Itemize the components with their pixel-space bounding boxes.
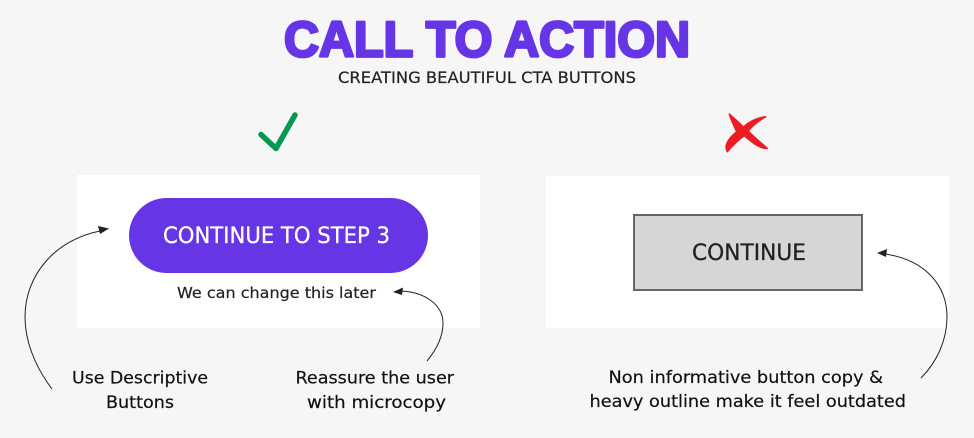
- arrow: bad copy label to button: [877, 249, 947, 378]
- label: non informative copy: heavy outline make it feel outdated: [590, 392, 906, 412]
- outdated button: CONTINUE: [692, 240, 806, 266]
- primary button: CONTINUE TO STEP 3: [163, 223, 390, 249]
- primary button: [129, 198, 428, 273]
- label: reassure the user: with microcopy: [307, 393, 446, 413]
- panel: bad example: [546, 176, 949, 328]
- label: use descriptive buttons: Use Descriptive: [72, 368, 208, 388]
- label: reassure the user: [296, 368, 454, 413]
- label: use descriptive buttons: Buttons: [106, 393, 174, 413]
- outdated button: [634, 215, 862, 290]
- arrow: reassure label to microcopy: [393, 288, 443, 361]
- arrow: descriptive label to button: [25, 226, 109, 389]
- microcopy: We can change this later: [177, 284, 377, 302]
- title: CALL TO ACTION: [284, 12, 690, 68]
- label: reassure the user: Reassure the user: [296, 368, 454, 388]
- label: non informative copy: Non informative button copy &: [608, 368, 883, 388]
- label: use descriptive buttons: [72, 368, 208, 413]
- label: non informative copy: [590, 368, 906, 412]
- icon: green check mark: [261, 115, 295, 148]
- icon: red cross: [726, 114, 767, 152]
- panel: good example: [77, 175, 480, 328]
- subtitle: CREATING BEAUTIFUL CTA BUTTONS: [338, 68, 636, 87]
